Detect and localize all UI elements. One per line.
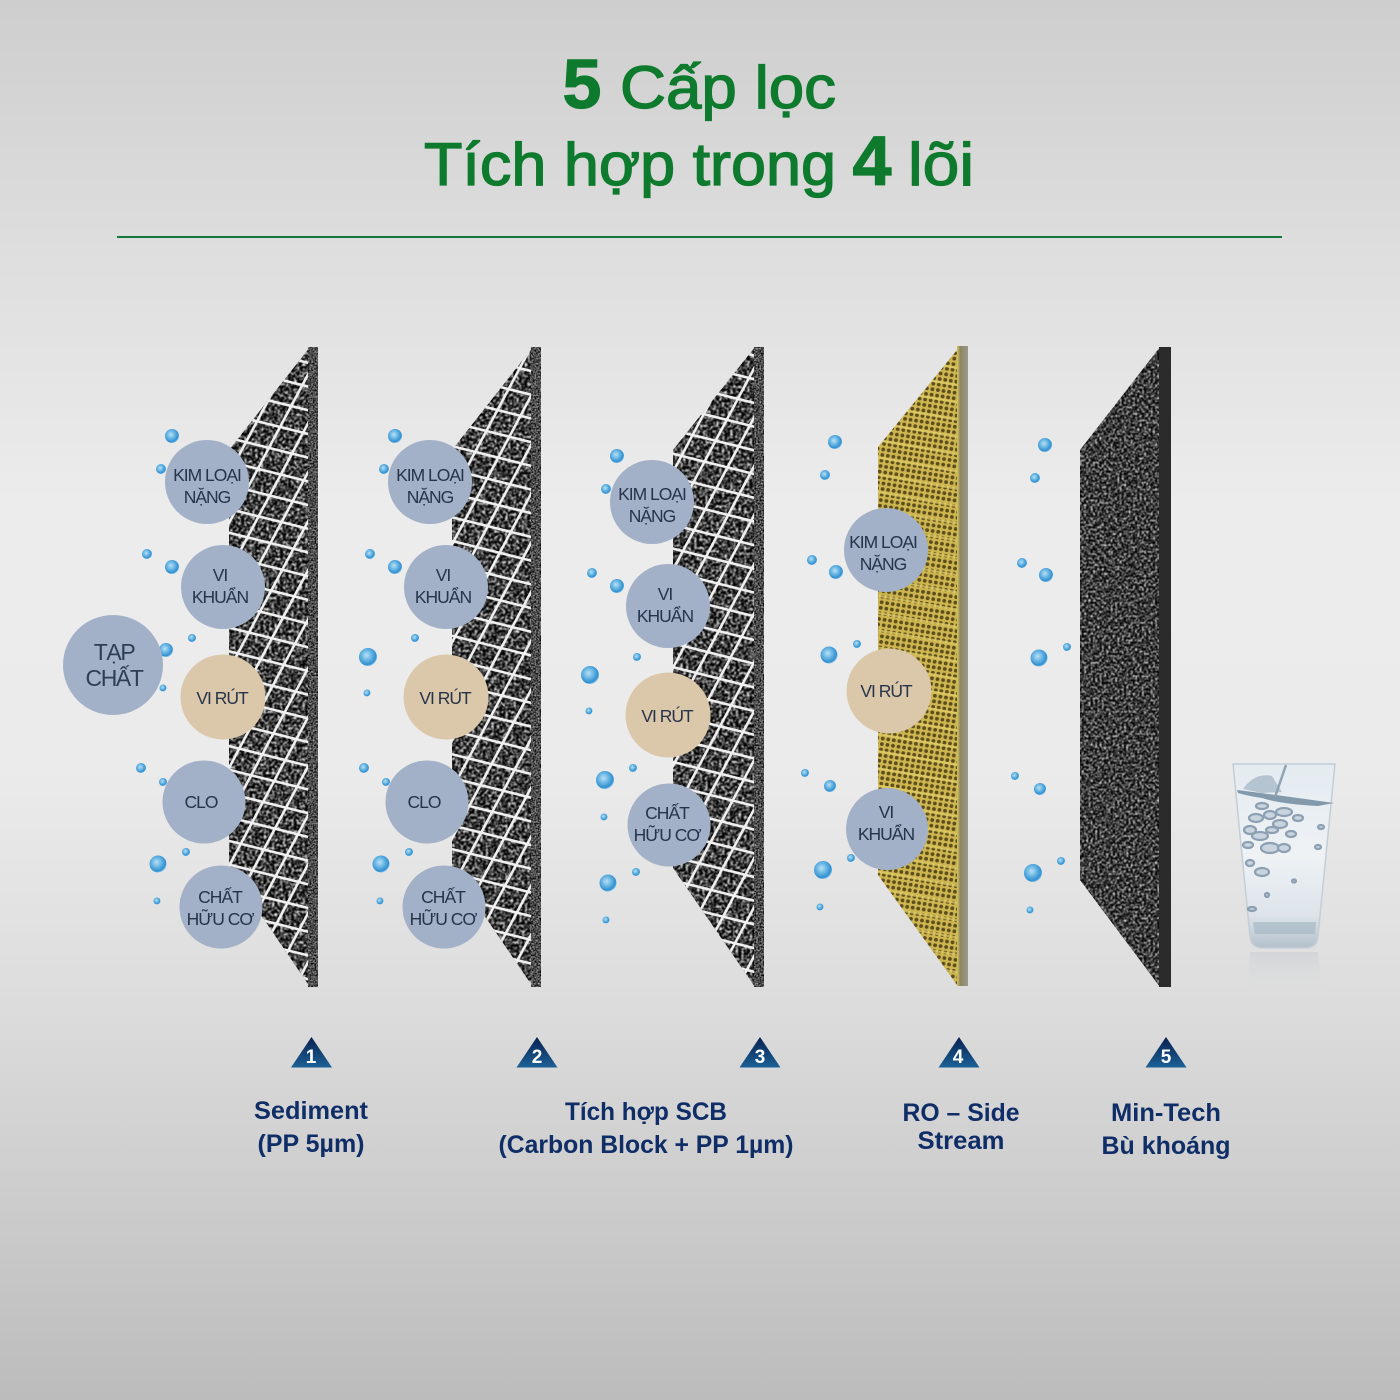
title: Cấp lọc bbox=[620, 54, 836, 121]
bubbles column 1: KHUẨN bbox=[192, 586, 248, 607]
bubbles column 4: KIM LOẠI bbox=[849, 532, 917, 552]
bubbles column 3 bbox=[610, 460, 710, 866]
bubbles column 4: KHUẨN bbox=[858, 823, 914, 844]
label: Sediment bbox=[254, 1097, 369, 1158]
droplets column 1 bbox=[136, 429, 196, 904]
marker 5 bbox=[1146, 1037, 1186, 1068]
marker 4 bbox=[938, 1037, 980, 1068]
impurity bubble: TẠP CHẤT: CHẤT bbox=[85, 664, 144, 691]
bubbles column 2: KIM LOẠI bbox=[396, 465, 464, 485]
bubbles column 1: CHẤT bbox=[198, 886, 243, 907]
droplets column 5 bbox=[1011, 438, 1071, 914]
droplets column 4 bbox=[801, 435, 861, 910]
bubbles column 2: VI RÚT bbox=[419, 687, 472, 708]
bubbles column 2 bbox=[386, 440, 488, 948]
bubbles column 3: VI RÚT bbox=[641, 705, 694, 726]
filter sheet 2 bbox=[448, 345, 541, 990]
filter sheet 1 bbox=[225, 345, 318, 990]
marker 1: 1 bbox=[306, 1047, 317, 1068]
bubbles column 3: KHUẨN bbox=[637, 605, 693, 626]
droplets column 2 bbox=[359, 429, 419, 904]
bubbles column 1: CLO bbox=[185, 792, 218, 812]
bubbles column 1: NẶNG bbox=[184, 487, 231, 507]
bubbles column 1: HỮU CƠ bbox=[187, 908, 254, 929]
bubbles column 3: HỮU CƠ bbox=[634, 824, 701, 845]
label: Min-Tech: Bù khoáng bbox=[1102, 1132, 1230, 1160]
bubbles column 2: KHUẨN bbox=[415, 586, 471, 607]
bubbles column 3: VI bbox=[658, 584, 672, 604]
bubbles column 4 bbox=[844, 508, 932, 870]
filter sheet 5: mineral bbox=[1078, 345, 1171, 990]
bubbles column 4: NẶNG bbox=[860, 554, 907, 574]
label: Min-Tech bbox=[1102, 1099, 1230, 1160]
bubbles column 2: NẶNG bbox=[407, 487, 454, 507]
bubbles column 2: CLO bbox=[408, 792, 441, 812]
marker 1 bbox=[291, 1037, 332, 1068]
bubbles column 4: VI bbox=[879, 802, 893, 822]
title: lõi bbox=[908, 131, 974, 198]
title: Tích hợp trong bbox=[424, 131, 836, 198]
bubbles column 3: KIM LOẠI bbox=[618, 484, 686, 504]
impurity bubble: TẠP CHẤT: TẠP bbox=[94, 639, 135, 665]
bubbles column 1 bbox=[162, 440, 266, 948]
marker 5: 5 bbox=[1161, 1047, 1172, 1068]
marker 4: 4 bbox=[953, 1047, 964, 1068]
filter sheet 4: RO membrane bbox=[875, 345, 968, 990]
label: Sediment: Sediment bbox=[254, 1097, 369, 1125]
bubbles column 2: HỮU CƠ bbox=[410, 908, 477, 929]
icon: glass of water bbox=[1233, 764, 1335, 948]
bubbles column 1: VI RÚT bbox=[196, 687, 249, 708]
bubbles column 1: VI bbox=[213, 565, 227, 585]
bubbles column 2: CHẤT bbox=[421, 886, 466, 907]
label: RO Side Stream bbox=[902, 1099, 1020, 1155]
bubbles column 2: VI bbox=[436, 565, 450, 585]
glass reflection bbox=[1247, 952, 1323, 1000]
droplets column 3 bbox=[581, 449, 641, 924]
bubbles column 1: KIM LOẠI bbox=[173, 465, 241, 485]
title bbox=[424, 45, 974, 200]
bubbles column 3: NẶNG bbox=[629, 506, 676, 526]
marker 3 bbox=[740, 1037, 780, 1068]
label: Tích hợp SCB: (Carbon Block + PP 1µm) bbox=[498, 1131, 794, 1159]
marker 2 bbox=[516, 1037, 558, 1068]
title divider bbox=[117, 236, 1282, 238]
bubbles column 4: VI RÚT bbox=[860, 680, 913, 701]
title: 4 bbox=[853, 122, 892, 200]
label: Sediment: (PP 5µm) bbox=[258, 1130, 364, 1158]
label: Tích hợp SCB bbox=[498, 1098, 794, 1159]
label: RO Side Stream: RO – Side bbox=[902, 1099, 1020, 1127]
filter sheet 3 bbox=[670, 345, 764, 990]
marker 3: 3 bbox=[755, 1047, 765, 1068]
label: Tích hợp SCB: Tích hợp SCB bbox=[565, 1098, 727, 1126]
bubbles column 3: CHẤT bbox=[645, 802, 690, 823]
marker 2: 2 bbox=[532, 1047, 542, 1068]
impurity bubble: TẠP CHẤT bbox=[63, 615, 163, 715]
label: Min-Tech: Min-Tech bbox=[1111, 1099, 1221, 1127]
title: 5 bbox=[563, 45, 601, 123]
label: RO Side Stream: Stream bbox=[918, 1127, 1004, 1155]
